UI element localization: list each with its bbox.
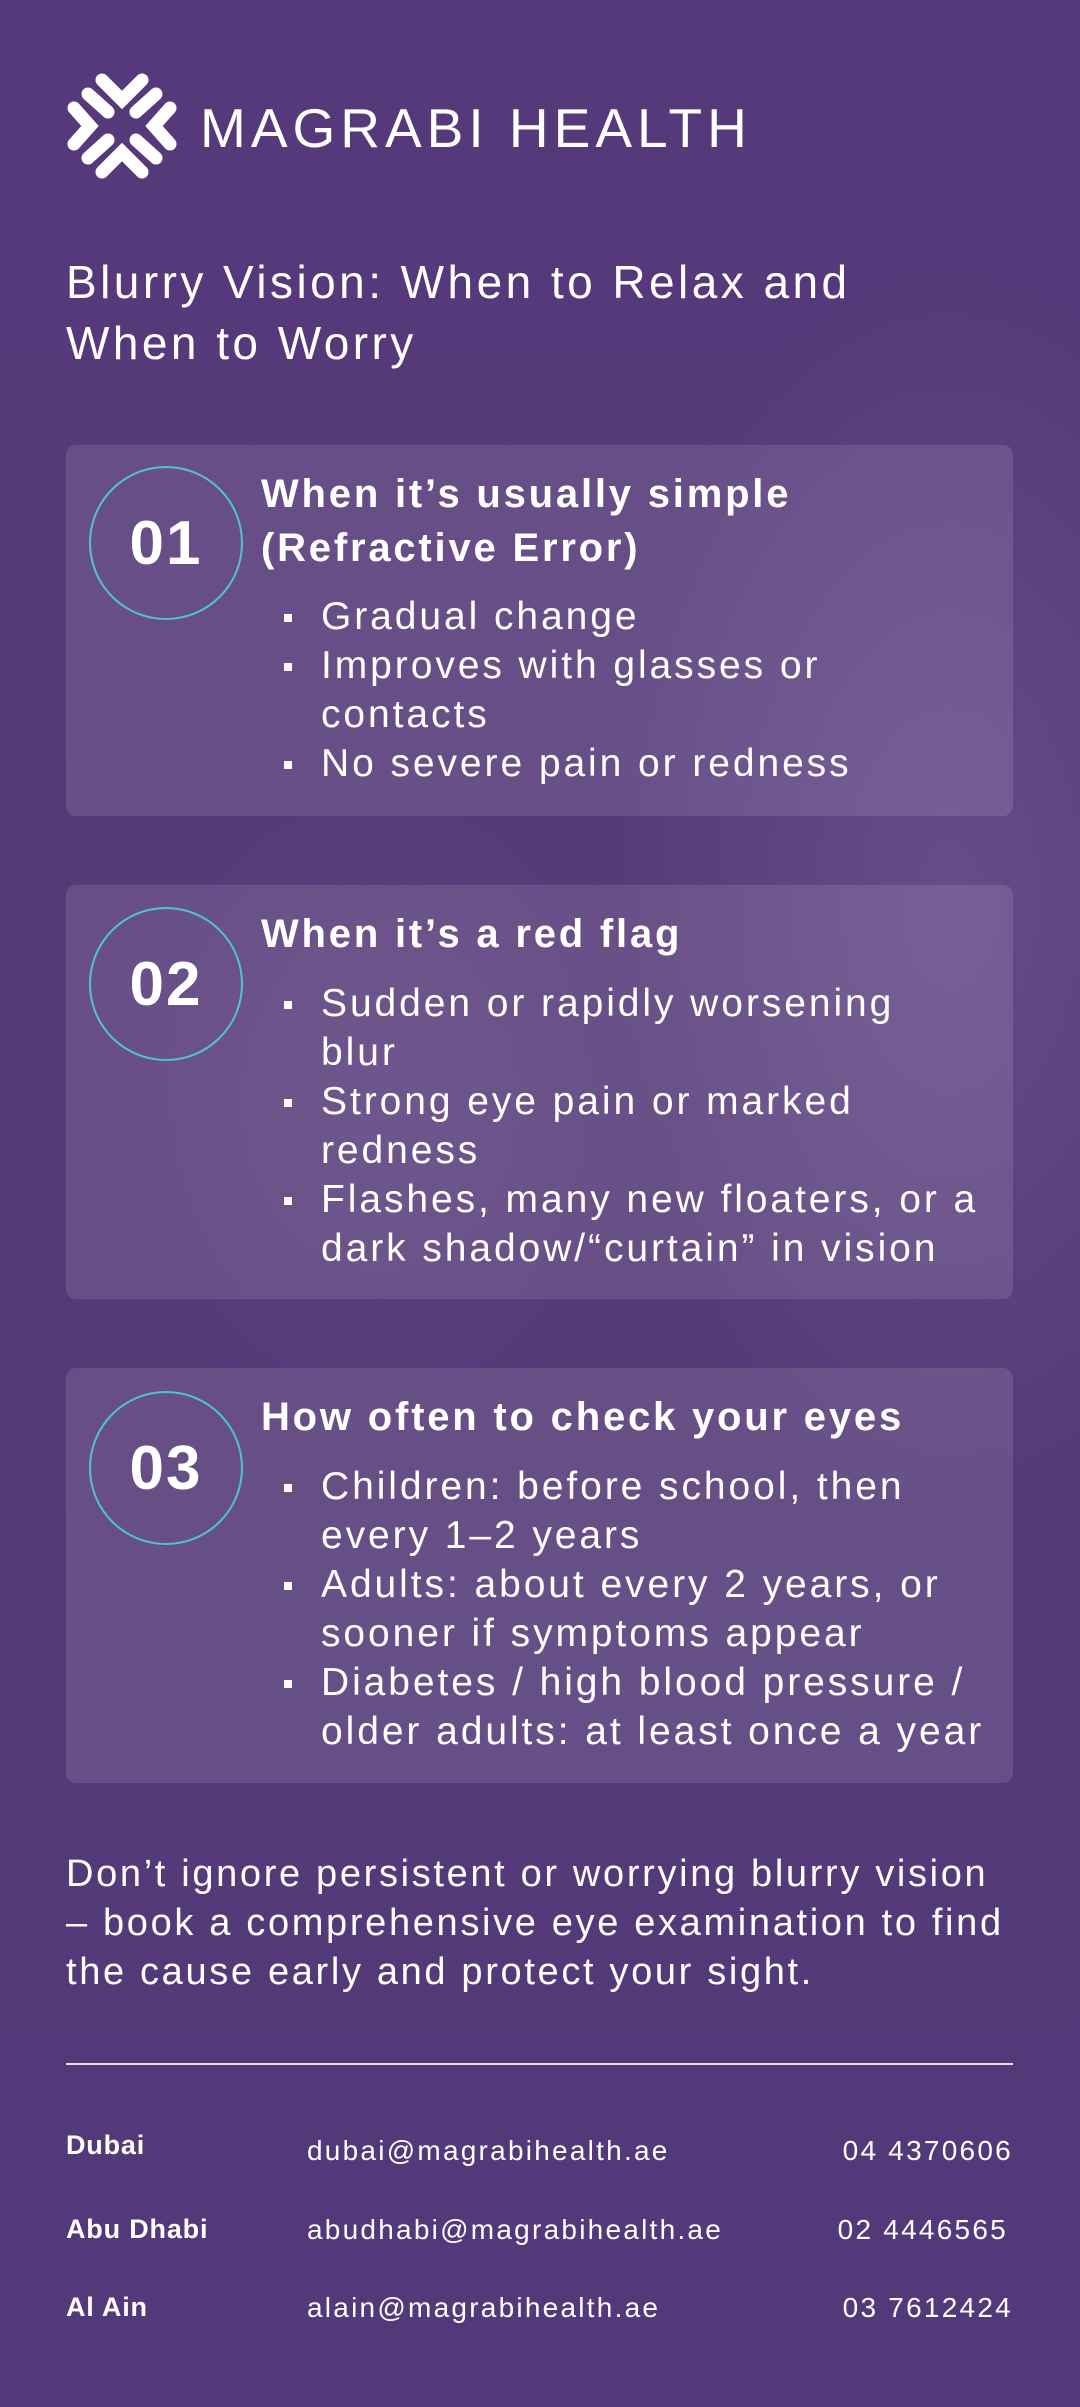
heading: When it’s a red flag xyxy=(261,912,682,956)
title: When to Worry xyxy=(66,317,417,369)
bullet list: blur xyxy=(321,1031,398,1074)
bullet list: No severe pain or redness xyxy=(321,742,852,785)
number 03 xyxy=(89,1391,243,1545)
number 01 xyxy=(89,466,243,620)
bullet list: sooner if symptoms appear xyxy=(321,1612,865,1655)
contact: Dubai xyxy=(66,2130,1013,2166)
number 02 xyxy=(89,907,243,1061)
bullet list: Children: before school, then xyxy=(321,1465,904,1508)
contact: Al Ain: 03 7612424 xyxy=(843,2292,1013,2323)
bullet list: Gradual change xyxy=(321,595,639,638)
bullet list: Sudden or rapidly worsening xyxy=(321,982,894,1025)
number 03: 03 xyxy=(130,1434,202,1502)
contact: Abu Dhabi: 02 4446565 xyxy=(838,2214,1008,2245)
number 02: 02 xyxy=(130,950,202,1018)
contact: Abu Dhabi: Abu Dhabi xyxy=(66,2214,208,2244)
title xyxy=(66,256,851,369)
contact: Al Ain xyxy=(66,2292,1013,2323)
heading: How often to check your eyes xyxy=(261,1395,904,1439)
contact: Abu Dhabi xyxy=(66,2214,1008,2245)
closing message: the cause early and protect your sight. xyxy=(66,1951,814,1993)
title: Blurry Vision: When to Relax and xyxy=(66,256,851,308)
heading: (Refractive Error) xyxy=(261,526,640,570)
bullet list: Strong eye pain or marked xyxy=(321,1080,854,1123)
contact: Al Ain: Al Ain xyxy=(66,2292,148,2322)
contact: Dubai: Dubai xyxy=(66,2130,145,2160)
bullet list xyxy=(284,595,852,785)
bullet list: contacts xyxy=(321,693,490,736)
bullet list: older adults: at least once a year xyxy=(321,1710,984,1753)
bullet list: every 1–2 years xyxy=(321,1514,642,1557)
closing message: Don’t ignore persistent or worrying blurry vision xyxy=(66,1853,988,1895)
contact: Dubai: 04 4370606 xyxy=(843,2135,1013,2166)
closing message xyxy=(66,1853,1004,1993)
bullet list: Adults: about every 2 years, or xyxy=(321,1563,941,1606)
contact: Al Ain: alain@magrabihealth.ae xyxy=(307,2292,660,2323)
bullet list xyxy=(284,982,978,1270)
bullet list: redness xyxy=(321,1129,480,1172)
panel: red flag xyxy=(66,885,1013,1299)
bullet list xyxy=(284,1465,984,1753)
contact: Dubai: dubai@magrabihealth.ae xyxy=(307,2135,670,2166)
icon: logo mark xyxy=(68,74,176,178)
panel: refractive error xyxy=(66,445,1013,816)
bullet list: dark shadow/“curtain” in vision xyxy=(321,1227,938,1270)
bullet list: Flashes, many new floaters, or a xyxy=(321,1178,978,1221)
contact: Abu Dhabi: abudhabi@magrabihealth.ae xyxy=(307,2214,723,2245)
brand name: MAGRABI HEALTH xyxy=(200,97,752,159)
closing message: – book a comprehensive eye examination to find xyxy=(66,1902,1004,1944)
heading: When it’s usually simple xyxy=(261,472,791,516)
number 01: 01 xyxy=(130,508,202,578)
bullet list: Improves with glasses or xyxy=(321,644,820,687)
logo xyxy=(68,74,752,178)
heading xyxy=(261,472,791,570)
bullet list: Diabetes / high blood pressure / xyxy=(321,1661,965,1704)
panel: how often xyxy=(66,1368,1013,1783)
